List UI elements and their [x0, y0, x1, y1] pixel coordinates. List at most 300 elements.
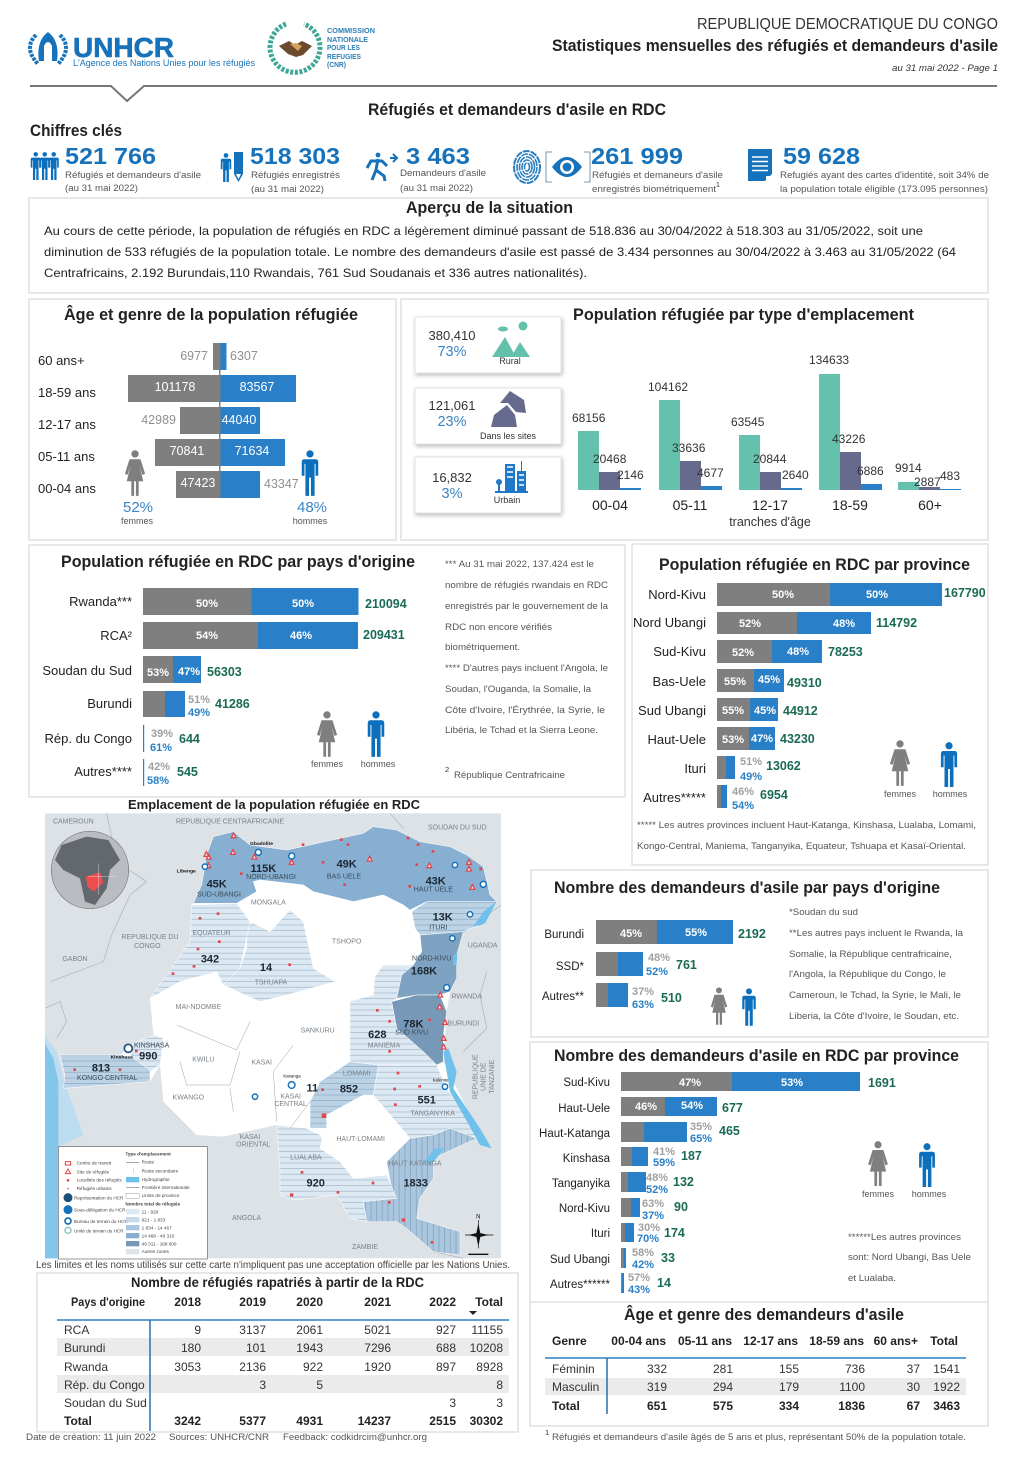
map labels: RWANDA: [451, 994, 482, 1001]
panel: population réfugiée par type d'emplacement: [401, 299, 988, 540]
panel: population réfugiée par province: [632, 544, 988, 865]
bar chart: origine: 63%: [632, 999, 654, 1011]
commission text: NATIONALE: [327, 35, 368, 44]
province: haut-lomami: [320, 1095, 410, 1178]
bar chart: tranches d'âge: 43226: [832, 432, 866, 446]
map labels: ITURI: [429, 925, 447, 932]
map values: 551: [417, 1095, 436, 1107]
footnote: et Lualaba.: [848, 1273, 896, 1284]
map values: 1833: [403, 1177, 428, 1189]
table: rapatriés: 3242: [174, 1414, 201, 1428]
bar chart: origine: 52%: [646, 966, 668, 978]
map base: [45, 813, 501, 1258]
kpi: réfugiés et demandeurs: Réfugiés et demandeurs d'asile: [65, 170, 201, 180]
table: rapatriés: 927: [436, 1323, 456, 1337]
table: rapatriés: Total: [64, 1414, 92, 1428]
bar chart: provinces: 47%: [751, 733, 773, 745]
kpi: biométrie: 261 999: [591, 143, 683, 169]
table: rapatriés: [57, 1295, 509, 1431]
kpi: cartes d'identité: la population totale éligible (173.095 personnes): [780, 184, 988, 194]
heading: Nombre des demandeurs d'asile en RDC par province: [554, 1046, 959, 1065]
bar chart: provinces: [633, 583, 986, 812]
bar chart: pays d'origine: Rép. du Congo: [45, 731, 132, 746]
gender shares: hommes: [293, 516, 328, 526]
table: rapatriés: 3137: [239, 1323, 266, 1337]
bar chart: province: Sud-Kivu: [563, 1077, 610, 1089]
footnotes: Somalie, la République centrafricaine,: [789, 949, 952, 960]
north arrow and scale: [465, 1214, 493, 1254]
map labels: SUD KIVU: [395, 1030, 428, 1037]
bar chart: province: 37%: [642, 1210, 664, 1222]
bar chart: province: 187: [681, 1149, 702, 1163]
bar chart: province: Haut-Uele: [558, 1103, 610, 1115]
map labels: NORD-UBANGI: [246, 874, 296, 881]
bar chart: pays d'origine: 50%: [196, 598, 218, 610]
bar chart: province: Tanganyika: [552, 1178, 611, 1190]
camps and pins: Kinshasa: [111, 1054, 133, 1060]
map values: 115K: [251, 863, 276, 875]
footnote: sont: Nord Ubangi, Bas Uele: [848, 1252, 971, 1263]
bar chart: pays d'origine: 41286: [215, 697, 250, 711]
heading: Aperçu de la situation: [406, 198, 573, 217]
map values: 14: [260, 962, 273, 974]
card: urbain: 3%: [442, 486, 463, 502]
bar chart: provinces: 52%: [732, 647, 754, 659]
bar chart: pays d'origine: RCA²: [100, 628, 133, 643]
bar chart: province: 465: [719, 1124, 740, 1138]
table: rapatriés: 3: [449, 1396, 456, 1410]
bar chart: tranches d'âge: 9914: [895, 461, 922, 475]
bar chart: province: Sud Ubangi: [550, 1254, 610, 1266]
bar chart: provinces: 114792: [876, 616, 917, 630]
table: rapatriés: Burundi: [64, 1341, 105, 1355]
icon: person and pen: [221, 152, 243, 182]
table: rapatriés: 11155: [471, 1323, 503, 1337]
wordmark: UNHCR: [73, 32, 174, 63]
bar chart: province: 48%: [646, 1172, 668, 1184]
map labels: CONGO: [134, 943, 161, 950]
card: urbain: 16,832: [432, 470, 472, 485]
map labels: MONGALA: [251, 899, 286, 906]
document title block: Statistiques mensuelles des réfugiés et demandeurs d'asile: [552, 36, 998, 55]
bar chart: province: 63%: [642, 1198, 664, 1210]
icon: walking person: [367, 153, 397, 181]
icon: femmes: [868, 1141, 888, 1186]
map values: 78K: [403, 1019, 423, 1031]
map legend: Bureau de terrain du HCR: [74, 1219, 128, 1224]
bar chart: pays d'origine: 54%: [196, 630, 218, 642]
main heading: Réfugiés et demandeurs d'asile en RDC: [368, 100, 666, 119]
pyramid chart: 83567: [240, 380, 274, 394]
card: rural: 73%: [437, 344, 467, 360]
bar chart: province: 59%: [653, 1157, 675, 1169]
bar chart: provinces: 55%: [722, 705, 744, 717]
bar chart: province: 132: [673, 1175, 694, 1189]
bar chart: origine: 510: [661, 991, 682, 1005]
table: rapatriés: 10208: [470, 1341, 503, 1355]
footnote 1: 1: [545, 1428, 549, 1437]
bar chart: tranches d'âge: 4677: [697, 466, 724, 480]
bar chart: tranches d'âge: 483: [940, 469, 960, 483]
bar chart: province: Ituri: [591, 1228, 610, 1240]
map values: [92, 858, 453, 1190]
province: ituri: [412, 902, 497, 935]
map labels: [53, 818, 498, 1251]
bar chart: pays d'origine: Soudan du Sud: [42, 663, 132, 678]
bar chart: provinces: 48%: [787, 646, 809, 658]
map labels: REPUBLIQUE DU: [121, 934, 179, 941]
bar chart: pays d'origine: 39%: [151, 728, 173, 740]
map labels: BURUNDI: [447, 1020, 479, 1027]
map labels: EQUATEUR: [193, 930, 231, 937]
table: rapatriés: 3: [496, 1396, 503, 1410]
bar chart: tranches d'âge: 63545: [731, 415, 765, 429]
icon: femmes: [125, 450, 145, 496]
map labels: REPUBLIQUE CENTRAFRICAINE: [176, 818, 284, 825]
panel: population réfugiée par pays d'origine: [29, 545, 625, 797]
panel: demandeurs d'asile par province et âge: [530, 1042, 988, 1426]
map labels: UGANDA: [468, 942, 498, 949]
internal province boundaries: [177, 1022, 310, 1128]
age labels: [38, 353, 96, 496]
pyramid chart: 101178: [155, 380, 195, 394]
table: âge et genre: 332: [647, 1362, 667, 1376]
province: tshuapa: [223, 910, 335, 1002]
camps and pins: Libenge: [177, 868, 196, 874]
bar chart: province: 47%: [679, 1077, 701, 1089]
map: [45, 813, 501, 1259]
icon: hommes: [302, 450, 318, 496]
table: âge et genre: 281: [713, 1362, 733, 1376]
map values: 852: [340, 1084, 358, 1096]
table: rapatriés: 5: [316, 1378, 323, 1392]
table: âge et genre: 1922: [933, 1380, 960, 1394]
footer sources: Sources: UNHCR/CNR: [169, 1432, 269, 1443]
map labels: NORD-KIVU: [412, 956, 451, 963]
footnotes: Côte d'Ivoire, l'Érythrée, la Syrie, le: [445, 705, 605, 716]
bar chart: provinces: Sud Ubangi: [638, 703, 706, 718]
footnote 1: Réfugiés et demandeurs d'asile âgés de 5 ans et plus, représentant 50% de la population totale.: [552, 1432, 966, 1443]
table: rapatriés: 5377: [239, 1414, 266, 1428]
pyramid chart: [128, 343, 299, 498]
kpi: réfugiés et demandeurs: [31, 143, 201, 193]
bar chart: pays d'origine: Burundi: [87, 696, 132, 711]
bar chart: provinces: Bas-Uele: [653, 674, 706, 689]
provinces: [60, 827, 497, 1255]
icon: femmes: [317, 711, 337, 757]
table: rapatriés: 3053: [174, 1360, 201, 1374]
footnotes: *** Au 31 mai 2022, 137.424 est le: [445, 559, 594, 570]
map legend: Route secondaire: [142, 1168, 179, 1173]
bar chart: province: 33: [661, 1251, 675, 1265]
commission text: COMMISSION: [327, 26, 375, 35]
map labels: TANGANYIKA: [410, 1111, 455, 1118]
table: âge et genre: [545, 1334, 966, 1414]
CNR logo: [270, 24, 375, 72]
bar chart: origine: 45%: [620, 928, 642, 940]
age labels: 60 ans+: [38, 353, 85, 368]
bar chart: provinces: 48%: [833, 618, 855, 630]
map legend: Nombre total de réfugiés: [125, 1202, 181, 1207]
bar chart: pays d'origine: 210094: [365, 597, 407, 611]
table: rapatriés: 2136: [239, 1360, 266, 1374]
bar chart: province: 42%: [632, 1259, 654, 1271]
heading: Population réfugiée en RDC par province: [659, 555, 970, 574]
table: âge et genre: 334: [779, 1399, 799, 1413]
kpi: demandeurs d'asile: (au 31 mai 2022): [400, 183, 473, 193]
map values: 49K: [337, 858, 357, 870]
map labels: ORIENTAL: [236, 1142, 271, 1149]
bar chart: tranches d'âge: 20844: [753, 452, 787, 466]
footnote: ***** Les autres provinces incluent Haut-Katanga, Kinshasa, Lualaba, Lomami,: [637, 820, 976, 831]
bar chart: provinces: Nord Ubangi: [633, 615, 706, 630]
pyramid chart: 43347: [264, 477, 299, 491]
map legend: Frontière internationale: [142, 1185, 190, 1190]
footnotes: [789, 907, 964, 1022]
kpi: cartes d'identité: 59 628: [783, 143, 860, 169]
map legend: 1 834 - 14 467: [142, 1225, 172, 1230]
bar chart: province: [539, 1072, 896, 1296]
table: âge et genre: Féminin: [552, 1362, 595, 1376]
heading: Nombre des demandeurs d'asile par pays d'origine: [554, 878, 940, 897]
age labels: 18-59 ans: [38, 385, 96, 400]
bar chart: province: 65%: [690, 1133, 712, 1145]
bar chart: tranches d'âge: [572, 353, 961, 529]
map labels: KONGO CENTRAL: [77, 1075, 138, 1082]
bar chart: provinces: Sud-Kivu: [653, 644, 706, 659]
map values: 628: [368, 1029, 386, 1041]
pyramid chart: 6307: [230, 349, 258, 363]
bar chart: provinces: 54%: [732, 800, 754, 812]
bar chart: pays d'origine: [42, 588, 407, 787]
country underlay: [60, 827, 497, 1255]
card: rural: 380,410: [428, 328, 476, 343]
bar chart: province: 677: [722, 1101, 743, 1115]
heading: Population réfugiée en RDC par pays d'origine: [61, 552, 415, 571]
bar chart: provinces: Haut-Uele: [647, 732, 706, 747]
icon: hommes: [919, 1143, 935, 1187]
heading: Nombre de réfugiés rapatriés à partir de la RDC: [131, 1275, 424, 1290]
bar chart: pays d'origine: 42%: [148, 761, 170, 773]
bar chart: tranches d'âge: 2640: [782, 468, 809, 482]
map values: 990: [139, 1050, 157, 1062]
camps and pins: Kananga: [283, 1074, 301, 1079]
province: mongala: [237, 880, 313, 932]
map legend: Représentation du HCR: [74, 1196, 124, 1201]
header rule with notch: [30, 86, 997, 101]
footnotes: l'Angola, la République du Congo, le: [789, 969, 946, 980]
table: âge et genre: 60 ans+: [874, 1334, 918, 1348]
map labels: MAI-NDOMBE: [176, 1004, 221, 1011]
bar chart: provinces: 51%: [740, 756, 762, 768]
bar chart: provinces: 6954: [760, 788, 788, 802]
kpi: biométrie: 1: [716, 182, 720, 189]
bar chart: origine: 761: [676, 958, 697, 972]
map labels: REPUBLIQUE: [472, 1054, 479, 1099]
map labels: TSHUAPA: [255, 980, 288, 987]
document title block: [552, 16, 998, 73]
footnote: ******Les autres provinces: [848, 1232, 961, 1243]
icon: femmes: [890, 740, 910, 786]
table: rapatriés: 2061: [296, 1323, 323, 1337]
age labels: 00-04 ans: [38, 481, 96, 496]
UNHCR logo: [30, 32, 255, 68]
north arrow and scale: N: [476, 1214, 480, 1220]
legend labels: hommes: [912, 1189, 947, 1199]
bar chart: provinces: 13062: [766, 759, 801, 773]
map labels: KASAI: [280, 1093, 301, 1100]
bar chart: provinces: Autres*****: [643, 790, 706, 805]
map legend: Sous-délégation du HCR: [74, 1208, 126, 1213]
map legend: Centre de transit: [77, 1160, 112, 1165]
kpi: biométrie: Réfugiés et demaneurs d'asile: [592, 170, 723, 180]
map legend: Unité de terrain du HCR: [74, 1229, 124, 1234]
legend labels: [311, 759, 396, 769]
icon: fingerprint: [514, 151, 540, 183]
icon: hommes: [941, 742, 957, 787]
card: dans les sites: 121,061: [428, 398, 476, 413]
bar chart: tranches d'âge: 05-11: [673, 497, 708, 513]
bar chart: origine: SSD*: [556, 961, 585, 973]
map legend: Hydrographie: [142, 1177, 170, 1182]
bar chart: province: 14: [657, 1276, 671, 1290]
bar chart: tranches d'âge: 2146: [617, 468, 644, 482]
bar chart: province: 52%: [646, 1184, 668, 1196]
pyramid chart: 42989: [141, 413, 176, 427]
bar chart: provinces: 50%: [866, 589, 888, 601]
bar chart: province: 46%: [635, 1101, 657, 1113]
map labels: BAS UELE: [327, 873, 361, 880]
kpi: biométrie: [514, 143, 723, 194]
bar chart: province: 53%: [781, 1077, 803, 1089]
table: âge et genre: Total: [930, 1334, 958, 1348]
table: rapatriés: 14237: [358, 1414, 391, 1428]
icon: hommes: [368, 711, 384, 757]
province: nord-kivu: [397, 932, 463, 998]
bar chart: origine: 37%: [632, 986, 654, 998]
table: rapatriés: 688: [436, 1341, 456, 1355]
province: kongo central: [60, 1055, 150, 1088]
table: rapatriés: 9: [194, 1323, 201, 1337]
bar chart: tranches d'âge: 104162: [648, 380, 688, 394]
table: rapatriés: 8928: [476, 1360, 503, 1374]
bar chart: provinces: 78253: [828, 645, 863, 659]
bar chart: provinces: Ituri: [684, 761, 706, 776]
footer sources: Date de création: 11 juin 2022: [26, 1432, 156, 1443]
icon: eye with brackets: [546, 152, 590, 182]
table: âge et genre: 651: [647, 1399, 667, 1413]
document title block: REPUBLIQUE DEMOCRATIQUE DU CONGO: [697, 16, 998, 33]
map labels: KWILU: [192, 1057, 214, 1064]
card: rural: Rural: [499, 356, 521, 366]
map labels: LOMAMI: [343, 1071, 370, 1078]
bar chart: pays d'origine: 50%: [292, 598, 314, 610]
bar chart: provinces: 44912: [783, 704, 818, 718]
map values: 45K: [207, 879, 227, 891]
pyramid chart: 6977: [180, 349, 208, 363]
commission text: REFUGIES: [327, 52, 361, 61]
legend labels: hommes: [933, 789, 968, 799]
footnotes: Cameroun, le Tchad, la Syrie, le Mali, le: [789, 990, 961, 1001]
bar chart: provinces: Nord-Kivu: [648, 587, 706, 602]
footnotes: *Soudan du sud: [789, 907, 858, 918]
legend labels: femmes: [884, 789, 916, 799]
bar chart: pays d'origine: 53%: [147, 667, 169, 679]
table: rapatriés: 3: [259, 1378, 266, 1392]
table: âge et genre: 179: [779, 1380, 799, 1394]
situation text: Centrafricains, 2.192 Burundais,110 Rwandais, 761 Sud Soudanais et 336 autres nationalités).: [44, 266, 587, 280]
footnotes: Libéria, le Tchad et la Sierra Leone.: [445, 725, 598, 736]
icon: mountain: [492, 322, 530, 357]
province: lualaba: [277, 1125, 397, 1222]
table: rapatriés: 2021: [364, 1295, 391, 1309]
age labels: 12-17 ans: [38, 417, 96, 432]
bar chart: pays d'origine: 58%: [147, 775, 169, 787]
map labels: CAMEROUN: [53, 818, 94, 825]
bar chart: province: 41%: [653, 1146, 675, 1158]
footnotes: **** D'autres pays incluent l'Angola, le: [445, 663, 608, 674]
icon: hommes: [742, 988, 756, 1026]
table: rapatriés: RCA: [64, 1323, 89, 1337]
footnotes: RDC non encore vérifiés: [445, 622, 552, 633]
pyramid chart: 44040: [222, 413, 256, 427]
map legend: Localités des réfugiés: [77, 1178, 122, 1183]
footnotes: biométriquement.: [445, 642, 520, 653]
footnotes: nombre de réfugiés rwandais en RDC: [445, 580, 608, 591]
bar chart: provinces: 52%: [739, 618, 761, 630]
table: âge et genre: 575: [713, 1399, 733, 1413]
table: âge et genre: 30: [907, 1380, 920, 1394]
map values: 813: [92, 1063, 110, 1075]
bar chart: tranches d'âge: 33636: [672, 441, 706, 455]
icon: document: [748, 149, 772, 181]
icon: city: [495, 461, 528, 493]
table: âge et genre: Total: [552, 1399, 580, 1413]
table: âge et genre: Genre: [552, 1334, 587, 1348]
map legend: 11 - 920: [142, 1209, 159, 1214]
panel: réfugiés rapatriés: [37, 1273, 518, 1432]
map labels: SUD-UBANGI: [197, 892, 241, 899]
province: tanganyika: [373, 1065, 477, 1138]
bar chart: provinces: 49310: [787, 676, 822, 690]
bar chart: provinces: 50%: [772, 589, 794, 601]
commission text: [327, 26, 375, 69]
bar chart: provinces: 43230: [780, 732, 815, 746]
bar chart: tranches d'âge: 12-17: [752, 497, 788, 513]
footnotes: [445, 559, 609, 781]
kpi: demandeurs d'asile: Demandeurs d'asile: [400, 168, 486, 178]
card: dans les sites: 23%: [437, 414, 467, 430]
table: âge et genre: 00-04 ans: [611, 1334, 666, 1348]
map legend: Autres zones: [142, 1249, 170, 1254]
icon: group of people: [31, 152, 59, 180]
table: rapatriés: 101: [246, 1341, 266, 1355]
map disclaimer: Les limites et les noms utilisés sur cette carte n'impliquent pas une acceptation officielle par les Nations Unies.: [36, 1260, 510, 1271]
table: âge et genre: 1836: [838, 1399, 865, 1413]
table: rapatriés: 180: [181, 1341, 201, 1355]
kpi: réfugiés et demandeurs: 521 766: [65, 143, 156, 169]
map legend: Réfugiés urbains: [77, 1186, 112, 1191]
card: urbain: [415, 457, 561, 513]
kpi: réfugiés enregistrés: (au 31 mai 2022): [251, 184, 324, 194]
table: rapatriés: 8: [496, 1378, 503, 1392]
bar chart: pays d'origine: 545: [177, 765, 198, 779]
table: âge et genre: 294: [713, 1380, 733, 1394]
map labels: UNIE DE: [481, 1062, 488, 1091]
bar chart: province: Autres******: [550, 1279, 611, 1291]
table: rapatriés: 897: [436, 1360, 456, 1374]
camps and pins: [73, 833, 486, 1244]
